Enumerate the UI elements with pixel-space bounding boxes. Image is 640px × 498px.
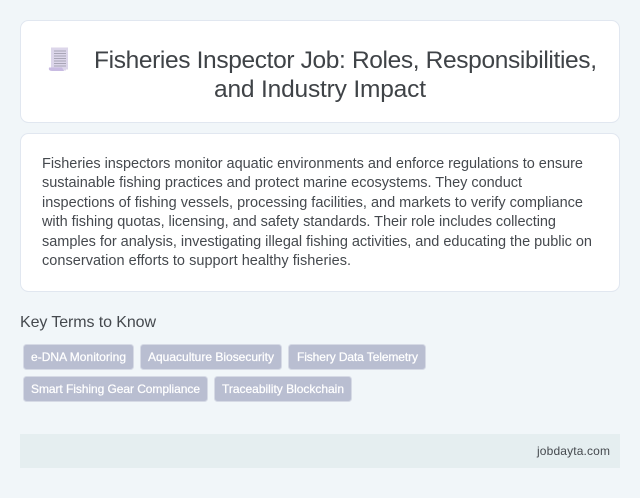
tag: e-DNA Monitoring [24,344,134,370]
title: and Industry Impact [214,76,426,103]
description text: with fishing quotas, licensing, and safety standards. Their role includes collecting [41,214,556,230]
panel: description card [20,134,620,292]
tag: Aquaculture Biosecurity: Aquaculture Biosecurity [148,350,274,364]
tag: e-DNA Monitoring: e-DNA Monitoring [31,350,126,364]
tag: Traceability Blockchain [214,376,352,402]
icon: document scroll [49,48,68,71]
description text: inspections of fishing vessels, processing facilities, and markets to verify compliance [42,195,583,211]
title [94,47,597,103]
title: Fisheries Inspector Job: Roles, Responsibilities, [94,47,597,74]
tag: Fishery Data Telemetry: Fishery Data Telemetry [297,350,418,364]
tag: Aquaculture Biosecurity [140,344,282,370]
tag: Smart Fishing Gear Compliance [24,376,208,402]
heading: key terms: Key Terms to Know [20,314,156,331]
footer [20,434,620,468]
description text: conservation efforts to support healthy fisheries. [42,253,351,269]
panel: title card [20,20,620,122]
tag: Traceability Blockchain: Traceability Blockchain [222,382,344,396]
description text [41,156,592,269]
tag: Fishery Data Telemetry [288,344,426,370]
description text: sustainable fishing practices and protect marine ecosystems. They conduct [42,175,522,191]
description text: samples for analysis, investigating illegal fishing activities, and educating the public on [42,234,592,250]
key terms tags [24,344,426,402]
tag: Smart Fishing Gear Compliance: Smart Fishing Gear Compliance [31,382,200,396]
footer source text: jobdayta.com [536,444,610,458]
description text: Fisheries inspectors monitor aquatic environments and enforce regulations to ensure [42,156,583,172]
